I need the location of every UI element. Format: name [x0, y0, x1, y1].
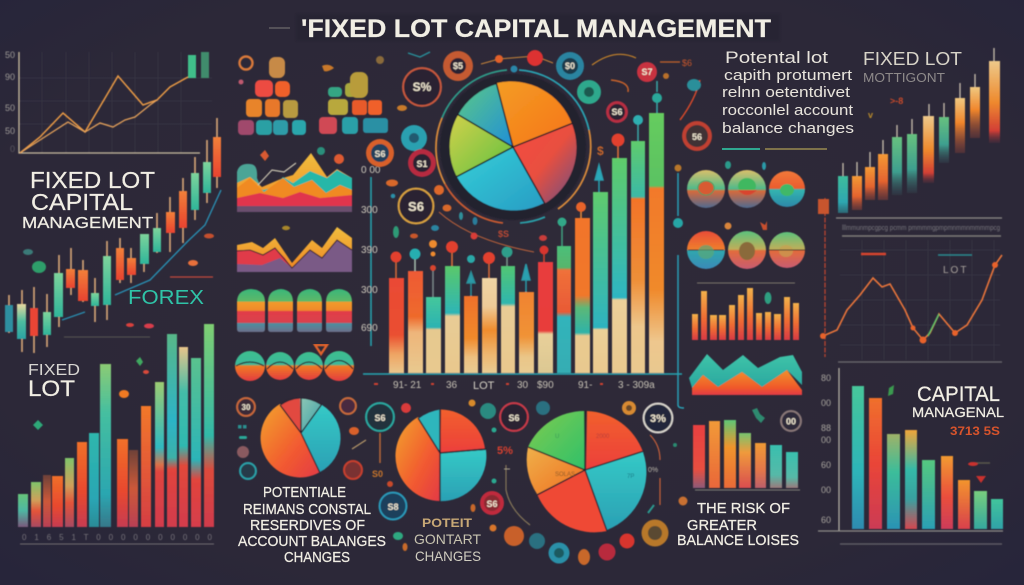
y axis labels: 88: [821, 423, 831, 433]
pie: bottom large: SOLAS: [555, 472, 575, 478]
y axis labels: 00: [821, 435, 831, 445]
text block: top right: Potental lot: [725, 48, 828, 67]
text block: top right: rocconlel account: [722, 102, 854, 119]
badge: small bottom group: S0: [372, 469, 383, 479]
heading: fixed lot capital management left: CAPITAL: [31, 189, 133, 215]
green bars at top: [188, 52, 209, 78]
heading: capital right: 3713 5S: [950, 424, 1000, 438]
x axis labels: 36: [446, 380, 458, 391]
badge: orange top: $5: [453, 61, 463, 71]
y axis labels: 50: [5, 50, 15, 60]
badge: s6 teal: S6: [374, 413, 386, 423]
text block: potentiale: ACCOUNT BALANGES: [238, 533, 386, 550]
badge: small bottom group: 0%: [648, 467, 658, 474]
badge: s6 teal: [366, 403, 394, 431]
trend line: [62, 190, 221, 320]
text block: top right: relnn oetentdivet: [722, 84, 851, 101]
badge: s6 red: [480, 491, 504, 515]
x axis labels: [393, 380, 655, 392]
heading: fixed lot right: [863, 49, 962, 85]
badge: small left group: [237, 398, 366, 479]
y axis labels: 50: [5, 126, 15, 136]
label: forex: FOREX: [128, 287, 204, 309]
x axis labels: 3 - 309a: [618, 380, 655, 391]
chart: right line chart: [818, 198, 1002, 362]
badge: red s6: S6: [611, 107, 623, 117]
y axis labels: 50: [5, 103, 15, 113]
badge: s8 teal: [380, 492, 406, 520]
line series: [823, 255, 1002, 340]
badge: teal-green: [577, 80, 601, 104]
badge: teal top: [556, 52, 584, 80]
text block: potent constant changes: GONTART: [414, 531, 481, 547]
y axis labels: [361, 165, 381, 334]
badge: red s6: [606, 101, 628, 123]
chart: stacked area 1: [237, 147, 352, 212]
text block: potentiale: REIMANS CONSTAL: [243, 501, 371, 518]
pie: bottom left: [261, 398, 341, 477]
badge: s6 white ring: S6: [508, 413, 520, 423]
icon group: bowls: [235, 345, 354, 381]
chart: right candles: v: [868, 110, 873, 120]
y axis labels: 690: [361, 323, 378, 334]
badge: orange top: [443, 51, 473, 81]
pie: bottom large: [527, 411, 646, 532]
y axis labels: 0 00: [361, 165, 381, 176]
pie: bottom middle: [395, 409, 486, 502]
badge: red s7: S7: [641, 67, 653, 77]
y axis labels: 300: [361, 205, 378, 216]
heading: fixed lot right: FIXED LOT: [863, 49, 962, 69]
bars: [693, 420, 798, 488]
title: 'FIXED LOT CAPITAL MANAGEMENT: [301, 15, 771, 43]
y axis labels: 00: [821, 485, 831, 495]
x axis labels: $90: [537, 380, 554, 391]
text block: top right: [722, 48, 854, 149]
y axis labels: 300: [361, 285, 378, 296]
right vertical line: [673, 164, 684, 408]
x axis labels: LOT: [473, 380, 495, 392]
chart: small bars center right: [692, 283, 799, 340]
scattered dots: [376, 52, 692, 252]
caption strip: lllmmunmpcgpcg pcmm pmmmmgpmpmnmmnmmmmpcg: [842, 225, 1000, 232]
x axis labels: 91- 21: [393, 380, 422, 391]
heading: capital right: MANAGENAL: [912, 404, 1004, 420]
y axis labels: 80: [821, 373, 831, 383]
scattered dots: $6: [682, 58, 692, 68]
bodies: [838, 61, 1000, 213]
badge: red s1: S1: [416, 159, 428, 169]
y axis labels: [821, 373, 831, 525]
chart: candlesticks: [5, 118, 221, 353]
label: lot: LOT: [943, 265, 968, 276]
y axis labels: 90: [5, 72, 15, 82]
chart: stacked area 2: [237, 226, 352, 272]
chart: lower right bars: [818, 368, 1003, 544]
connector with dots: [481, 50, 553, 66]
x axis labels: 91-: [578, 380, 592, 391]
badge: gold s6: S6: [408, 199, 424, 214]
label: fixed lot left bars: [28, 362, 80, 401]
badge: percent right: [644, 404, 672, 432]
badge: gold s6: [398, 188, 434, 224]
badge: gray: 00: [786, 416, 796, 426]
axis: [363, 177, 682, 374]
chart: risk bars: [693, 408, 801, 490]
text block: potentiale: CHANGES: [284, 549, 350, 566]
pins: [390, 81, 662, 297]
y axis labels: 60: [821, 460, 831, 470]
line series 1: [20, 76, 188, 153]
badge: small bottom group: 5%: [497, 445, 513, 457]
y axis labels: 60: [821, 515, 831, 525]
bars: [18, 324, 214, 527]
badge: orange s6 left: [366, 139, 394, 167]
heading: fixed lot right: MOTTIGONT: [863, 70, 945, 85]
badge: orange s6 left: S6: [374, 149, 386, 159]
badge: teal top: $0: [565, 61, 575, 71]
ring: [436, 70, 591, 223]
scattered dots: $: [597, 144, 604, 158]
y axis labels: 0: [10, 144, 15, 154]
text block: top right: balance changes: [722, 120, 854, 137]
candle wicks: [9, 118, 217, 353]
label: fixed lot left bars: FIXED: [28, 362, 80, 379]
heading: capital right: CAPITAL: [917, 383, 1000, 406]
text block: potent constant changes: [414, 516, 481, 564]
icon group: block pyramids: [238, 56, 388, 135]
badge: percent right: 3%: [650, 413, 666, 425]
y axis labels: 00: [821, 398, 831, 408]
text block: the risk: THE RISK OF: [697, 500, 790, 517]
badge: percent top: S%: [413, 80, 432, 94]
chart: top-left line chart: [5, 50, 212, 154]
pie: bottom large: 2000: [596, 434, 610, 440]
chart: main bar chart: [361, 81, 684, 408]
text block: potentiale: POTENTIALE: [263, 484, 346, 501]
text block: potentiale: [238, 484, 386, 566]
bars: [389, 113, 664, 373]
chart: bottom-left bars: [18, 323, 214, 544]
icons around bars: [33, 323, 154, 430]
icon group: bottom badges: [237, 398, 688, 565]
badge: small left group: 30: [242, 403, 251, 412]
heading: fixed lot capital management left: [22, 167, 155, 232]
text block: potentiale: RESERDIVES OF: [250, 517, 365, 534]
text block: the risk: [677, 500, 799, 549]
icon group: capsules: [237, 289, 352, 332]
pie: main center: [436, 66, 591, 223]
badge: red s7: [637, 62, 657, 82]
label: fixed lot left bars: LOT: [28, 376, 75, 401]
text block: the risk: GREATER: [687, 517, 757, 534]
pie: bottom large: 7P: [627, 474, 634, 480]
tick labels: 0 1 6 5 1 T 0 0 0 0 0 0 0 0 0 0: [22, 533, 213, 542]
heading: fixed lot capital management left: MANAGEMENT: [22, 215, 153, 232]
badge: percent top: [403, 68, 441, 106]
y axis labels: [5, 50, 15, 154]
x axis labels: 30: [517, 380, 529, 391]
wicks: [843, 48, 994, 176]
chart: right candles: >-8: [890, 96, 903, 106]
chart: zigzag area: [689, 354, 802, 395]
y axis labels: 390: [361, 245, 378, 256]
badge: s8 teal: S8: [387, 502, 399, 512]
panel: right badges: 56: [692, 132, 702, 142]
text block: top right: capith protumert: [724, 67, 853, 84]
text block: potent constant changes: CHANGES: [415, 548, 481, 564]
text block: the risk: BALANCE LOISES: [677, 532, 799, 549]
heading: capital right: [912, 383, 1004, 438]
badge: s6 red: S6: [486, 499, 498, 509]
pie: bottom large: U: [555, 434, 559, 440]
badge: small bottom group: [372, 400, 688, 565]
text block: potent constant changes: POTEIT: [422, 516, 473, 530]
heading: fixed lot capital management left: FIXED LOT: [30, 167, 155, 193]
icon group: segmented balls: [687, 161, 805, 269]
chart: right candles: [836, 48, 1002, 236]
line series 2: [20, 100, 157, 153]
small marks: [23, 234, 214, 277]
badge: red s1: [408, 149, 436, 177]
scattered dots: $S: [498, 229, 509, 239]
badge: s6 white ring: [500, 403, 528, 431]
icon group: main chart badges: [366, 50, 692, 252]
bars: [852, 386, 1003, 529]
candle bodies: [5, 137, 221, 339]
badge: teal swirl: [401, 125, 427, 151]
panel: right badges: [680, 79, 712, 151]
